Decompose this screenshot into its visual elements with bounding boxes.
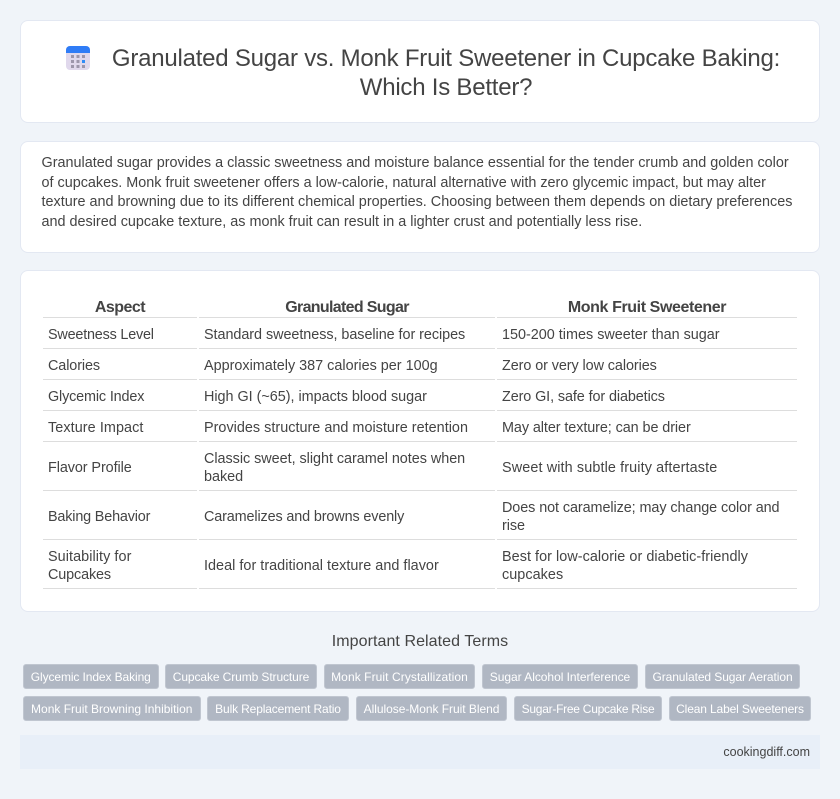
tag: Monk Fruit Crystallization — [331, 670, 468, 684]
tag — [165, 664, 317, 689]
table: comparison: cupcakes — [502, 567, 563, 583]
table: comparison: Ideal for traditional texture and flavor — [204, 558, 439, 574]
title — [112, 45, 780, 101]
tag: Clean Label Sweeteners — [676, 702, 804, 716]
table: comparison: rise — [502, 518, 525, 534]
table: comparison: Provides structure and moisture retention — [204, 420, 468, 436]
table: comparison: Standard sweetness, baseline for recipes — [204, 327, 465, 343]
row: flavor profile: Flavor Profile — [48, 460, 132, 476]
tag: Sugar Alcohol Interference — [490, 670, 630, 684]
tag — [645, 664, 800, 689]
table: comparison: Zero or very low calories — [502, 358, 657, 374]
heading: related terms: Important Related Terms — [332, 633, 508, 650]
table: comparison: Classic sweet, slight caramel notes when — [204, 451, 465, 467]
table: comparison: 150-200 times sweeter than sugar — [502, 327, 720, 343]
tag: Allulose-Monk Fruit Blend — [364, 702, 499, 716]
footer bar — [20, 735, 820, 769]
tag list: related terms — [23, 664, 811, 721]
row: baking behavior: Baking Behavior — [48, 509, 150, 525]
table: comparison: Caramelizes and browns evenly — [204, 509, 404, 525]
row: sweetness level: Sweetness Level — [48, 327, 154, 343]
table: comparison — [43, 299, 797, 589]
tag: Bulk Replacement Ratio — [215, 702, 341, 716]
table header: Aspect — [95, 299, 145, 316]
table: comparison: May alter texture; can be drier — [502, 420, 691, 436]
text block: summary: texture and browning due to its different chemical properties. Choosing between them depends on dietary preferences — [42, 194, 792, 210]
table: comparison: Best for low-calorie or diabetic-friendly — [502, 549, 748, 565]
tag — [514, 696, 662, 721]
row: glycemic index: Glycemic Index — [48, 389, 144, 405]
panel: comparison table — [20, 270, 820, 612]
row: suitability for cupcakes: Suitability for — [48, 549, 131, 565]
panel: header — [20, 20, 820, 123]
text block: summary — [42, 155, 792, 230]
row: texture impact: Texture Impact — [48, 420, 144, 436]
tag: Sugar-Free Cupcake Rise — [522, 702, 654, 716]
text block: summary: and desired cupcake texture, as monk fruit can result in a lighter crust and potentially less rise. — [42, 214, 642, 230]
table: comparison: Sweet with subtle fruity aftertaste — [502, 460, 717, 476]
tag — [324, 664, 475, 689]
table: comparison: Granulated Sugar — [285, 299, 409, 316]
text block: summary: of cupcakes. Monk fruit sweetener offers a low-calorie, natural alternative with zero glycemic impact, but may alter — [42, 175, 766, 191]
row: suitability for cupcakes — [48, 549, 132, 583]
tag: Monk Fruit Browning Inhibition — [31, 702, 192, 716]
table: comparison: High GI (~65), impacts blood sugar — [204, 389, 427, 405]
table: comparison: Does not caramelize; may change color and — [502, 500, 780, 516]
title: Which Is Better? — [360, 74, 532, 101]
tag — [669, 696, 811, 721]
tag — [482, 664, 638, 689]
panel: summary text — [20, 141, 820, 253]
table: comparison: Monk Fruit Sweetener — [568, 299, 726, 316]
tag: Cupcake Crumb Structure — [173, 670, 309, 684]
title: Granulated Sugar vs. Monk Fruit Sweetener in Cupcake Baking: — [112, 45, 780, 72]
icon: calendar — [66, 46, 90, 70]
text block: summary: Granulated sugar provides a classic sweetness and moisture balance essential for the tender crumb and golden color — [42, 155, 789, 171]
table: comparison: baked — [204, 469, 243, 485]
row: suitability for cupcakes: Cupcakes — [48, 567, 111, 583]
footer text: cookingdiff.com — [723, 745, 810, 759]
tag — [23, 696, 200, 721]
tag — [23, 664, 158, 689]
tag: Granulated Sugar Aeration — [652, 670, 793, 684]
tag — [207, 696, 349, 721]
table: comparison: Approximately 387 calories per 100g — [204, 358, 438, 374]
tag: Glycemic Index Baking — [31, 670, 151, 684]
tag — [356, 696, 507, 721]
table: comparison: Zero GI, safe for diabetics — [502, 389, 665, 405]
row: calories: Calories — [48, 358, 100, 374]
